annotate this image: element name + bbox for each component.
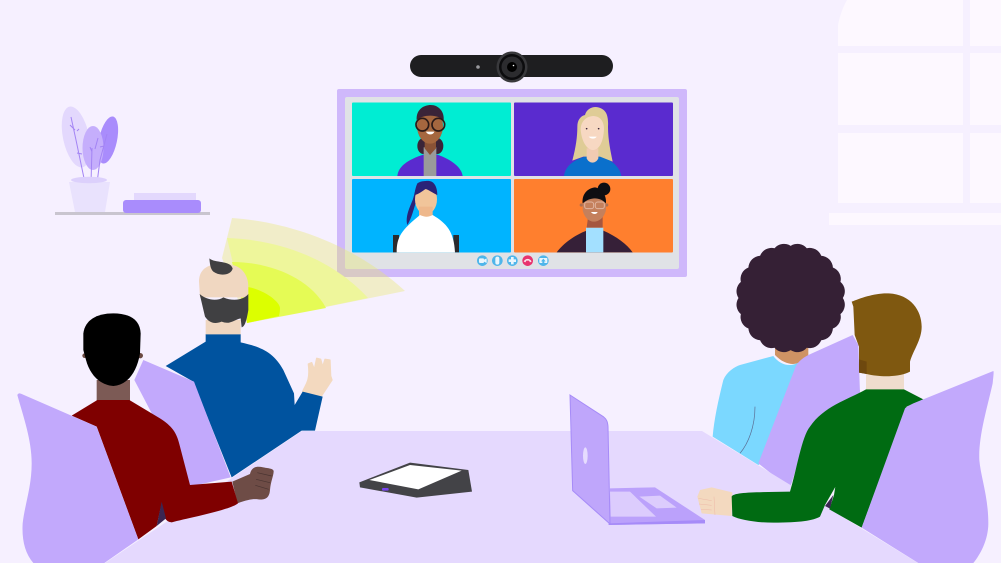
hair	[852, 293, 922, 376]
participant: woman in white	[393, 181, 459, 252]
video tile: blue	[352, 179, 511, 252]
green sweater	[732, 389, 923, 528]
participant: blonde woman	[564, 107, 621, 176]
neck	[206, 320, 241, 334]
laptop	[570, 395, 705, 525]
shirt gap	[157, 502, 166, 526]
video tile: orange	[514, 179, 673, 252]
right back chair and person	[713, 244, 860, 488]
camera field of view beam	[222, 218, 405, 323]
blue sweater	[166, 334, 323, 477]
afro hair	[737, 244, 845, 352]
neck	[866, 367, 904, 390]
participant: man with hair bun	[557, 183, 633, 252]
person: man in red	[17, 313, 274, 563]
hand	[697, 487, 732, 516]
shirt gap	[825, 495, 833, 509]
conference camera bar	[410, 52, 613, 82]
neck	[97, 380, 130, 401]
icon: plant	[57, 104, 122, 212]
beard	[200, 294, 248, 327]
light blue shirt	[713, 356, 860, 465]
neck	[775, 345, 808, 364]
red sweater	[72, 400, 238, 539]
wall monitor with video call	[337, 89, 687, 277]
books	[123, 193, 201, 213]
tablet controller	[359, 463, 472, 498]
window	[829, 0, 1001, 225]
hair tuft	[209, 258, 233, 275]
chair	[758, 335, 860, 488]
video tile: teal	[352, 102, 511, 176]
video tile: purple	[514, 102, 673, 176]
participant: woman with glasses	[397, 105, 463, 176]
person: man in green with chair and laptop	[570, 293, 994, 563]
shirt crease	[740, 407, 755, 453]
front right chair	[862, 371, 994, 563]
call controls	[477, 255, 549, 266]
ears	[82, 353, 143, 358]
front left chair	[17, 393, 138, 563]
green sweater sliver behind chair	[977, 465, 980, 479]
conference table	[105, 431, 918, 563]
raised hand	[303, 358, 332, 396]
head	[199, 264, 248, 297]
black hair	[83, 313, 141, 386]
hand	[232, 467, 274, 503]
shelf with plant and books	[55, 104, 210, 215]
back left chair	[134, 360, 231, 487]
person: bald man in blue	[166, 258, 332, 477]
